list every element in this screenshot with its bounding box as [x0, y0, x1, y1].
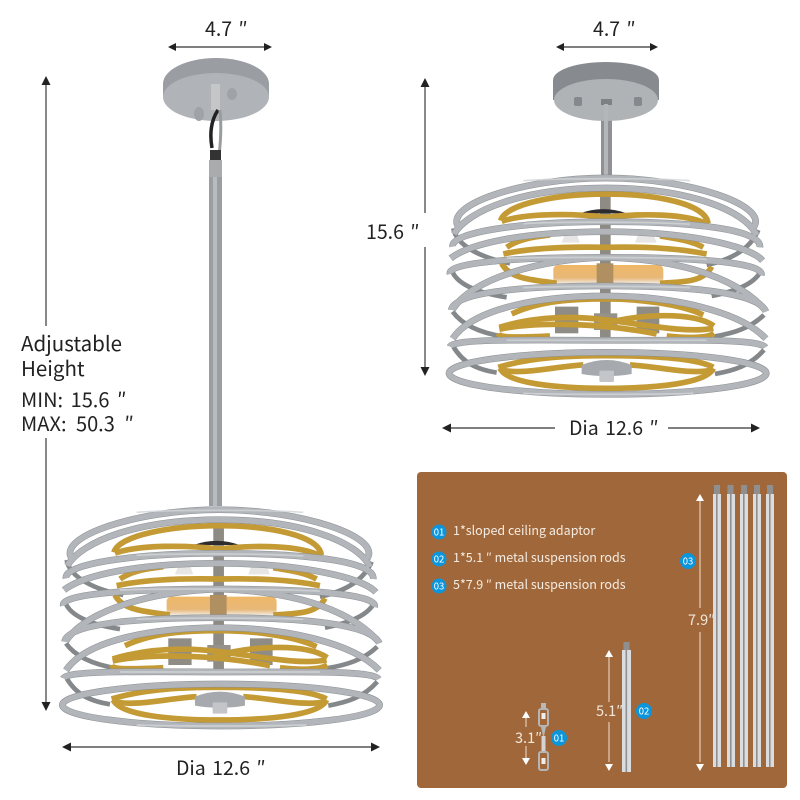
dimension: 7.9 inch arrow	[688, 494, 715, 771]
dimension: right lamp height: 15.6 ″	[366, 216, 420, 245]
dimension: 5.1 inch arrow: 5.1″	[596, 700, 623, 721]
dimension: right canopy width: 4.7 ″	[593, 13, 636, 42]
callout 01: 01	[554, 730, 564, 744]
icon: medium rod	[622, 642, 631, 772]
panel: right flush-mount lamp	[449, 62, 766, 394]
dimension: left lamp diameter: Dia 12.6 ″	[176, 752, 266, 781]
text: adjustable height	[21, 327, 134, 437]
text: adjustable height: Adjustable	[21, 327, 122, 357]
panel: left pendant lamp	[62, 58, 380, 726]
dimension: adjustable height arrow	[42, 76, 50, 711]
dimension: right lamp diameter	[442, 412, 760, 441]
panel: accessories	[417, 472, 787, 788]
legend item 02: 1*5.1 ″ metal suspension rods	[453, 547, 626, 566]
icon: hanging hook	[209, 110, 222, 177]
icon: sloped ceiling adaptor	[539, 703, 548, 770]
legend item 01: 1*sloped ceiling adaptor	[453, 520, 595, 539]
text: adjustable height: MAX: 50.3 ″	[21, 408, 134, 437]
mounting rod	[601, 100, 612, 176]
left lamp shade	[62, 510, 380, 726]
dimension: left canopy width	[168, 13, 272, 51]
right lamp shade	[449, 178, 766, 394]
dimension: right lamp height	[366, 78, 430, 376]
dimension: left canopy width: 4.7 ″	[205, 13, 248, 42]
icon: right ceiling canopy	[553, 62, 659, 121]
legend item 02: 02	[434, 552, 444, 566]
dimension: left lamp diameter	[62, 742, 380, 781]
text: adjustable height: MIN: 15.6 ″	[21, 384, 126, 413]
legend item 03: 03	[434, 578, 444, 592]
text: adjustable height: Height	[21, 352, 85, 382]
callout 03	[680, 553, 696, 569]
dimension: 3.1 inch arrow: 3.1″	[515, 727, 542, 748]
dimension: 7.9 inch arrow: 7.9″	[688, 609, 715, 630]
callout 01	[551, 730, 567, 746]
rod highlight	[213, 177, 217, 506]
dimension: 5.1 inch arrow	[596, 650, 623, 771]
callout 02: 02	[639, 704, 649, 718]
icon: left ceiling canopy	[163, 58, 269, 121]
legend item 03: 5*7.9 ″ metal suspension rods	[453, 574, 626, 593]
dimension: right canopy width	[556, 13, 658, 51]
legend item 01: 01	[434, 524, 444, 538]
dimension: right lamp diameter: Dia 12.6 ″	[569, 412, 659, 441]
rod highlight	[604, 104, 608, 176]
panel background	[417, 472, 787, 788]
suspension rod	[209, 160, 222, 506]
icon: five long rods	[713, 485, 774, 767]
dimension: 3.1 inch arrow	[515, 711, 542, 765]
callout 03: 03	[683, 554, 693, 568]
callout 02	[636, 703, 652, 719]
